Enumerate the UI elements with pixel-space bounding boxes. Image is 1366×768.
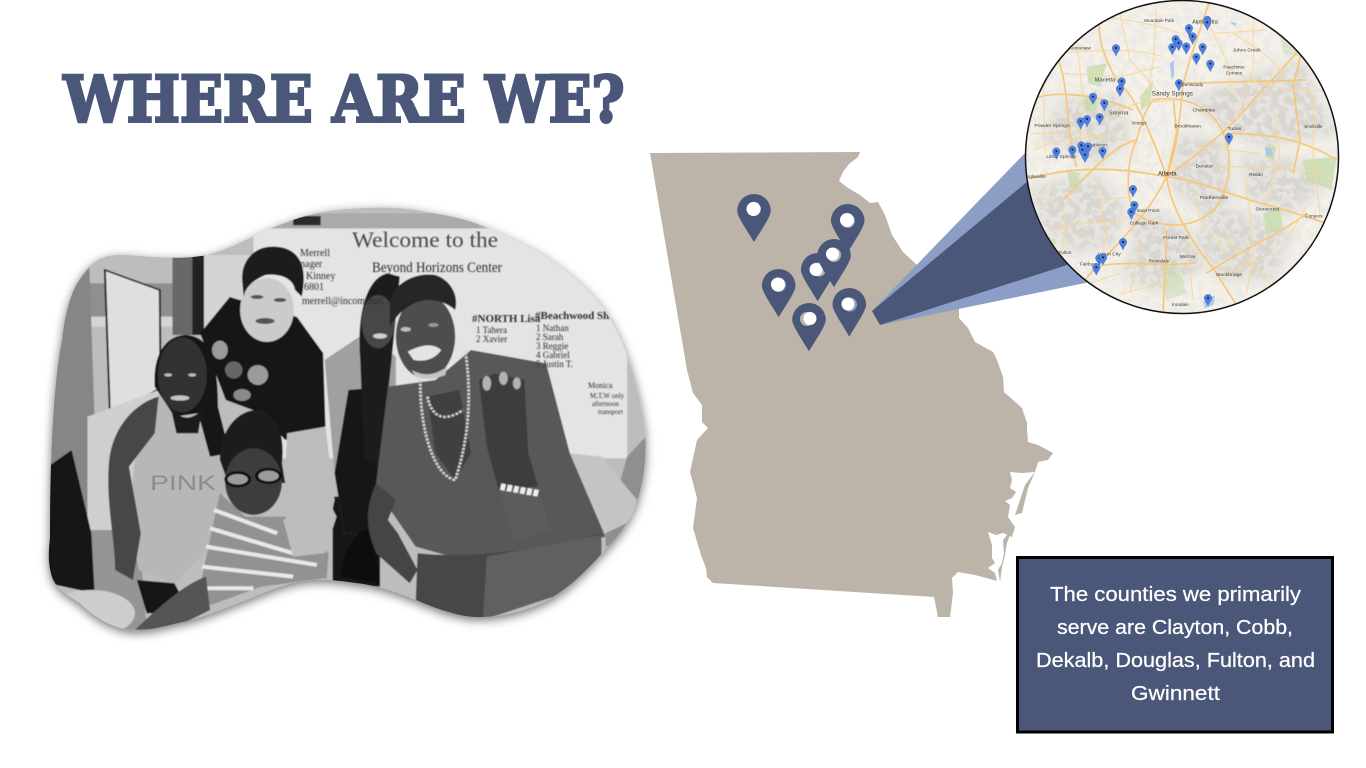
whiteboard handwriting: 1 Nathan [536, 323, 569, 333]
place labels: Morrow [1180, 254, 1196, 259]
whiteboard handwriting: 4 Gabriel [536, 350, 570, 360]
whiteboard handwriting: 2 Xavier [476, 334, 507, 344]
place labels: College Park [1130, 221, 1159, 227]
place labels: Alpharetta [1192, 19, 1219, 25]
map pin: west [762, 269, 796, 317]
callout cone: dark [872, 181, 1120, 325]
photo: group portrait in blob frame [42, 203, 653, 640]
whiteboard handwriting: M,T,W only [590, 392, 625, 400]
place labels: Dunwoody [1181, 82, 1204, 87]
place labels: Marietta [1095, 78, 1116, 84]
place labels: Panthersville [1200, 195, 1228, 201]
water [1170, 22, 1273, 308]
map pin: south [792, 303, 826, 351]
place labels: Decatur [1196, 164, 1213, 170]
map: Georgia state silhouette [650, 152, 1053, 617]
place labels: Lithia Springs [1046, 154, 1077, 160]
place labels: Kennesaw [1069, 45, 1092, 50]
callout: counties served: Dekalb, Douglas, Fulton, and [1036, 650, 1315, 672]
whiteboard handwriting: afternoon [592, 400, 619, 408]
place labels: Fairburn [1080, 261, 1098, 266]
urban texture grain [1020, 0, 1347, 317]
place labels: Stockbridge [1216, 272, 1242, 278]
place labels: Stonecrest [1255, 207, 1280, 213]
callout cone: light [872, 153, 1100, 325]
back woman [325, 333, 396, 537]
place labels: Peachtree [1223, 65, 1245, 70]
place labels: Redan [1249, 172, 1263, 177]
callout: counties served: serve are Clayton, Cobb, [1057, 617, 1293, 639]
whiteboard handwriting: 3 Reggie [536, 341, 568, 351]
place labels: Brookhaven [1174, 123, 1201, 129]
place labels [1021, 18, 1323, 307]
whiteboard handwriting: Beyond Horizons Center [372, 260, 502, 276]
place labels: Johns Creek [1233, 48, 1261, 54]
whiteboard handwriting: merrell@incommun [302, 296, 383, 307]
map: barrier islands [998, 472, 1035, 582]
whiteboard handwriting: 1 Tahera [476, 325, 507, 335]
left woman [132, 400, 160, 571]
whiteboard handwriting: transport [598, 408, 623, 416]
wheelchair [341, 528, 380, 583]
whiteboard handwriting: #NORTH Lisa [472, 313, 541, 325]
seated woman with glasses [202, 494, 329, 606]
map pin: centre-high [817, 239, 851, 287]
place labels: Vinings [1131, 121, 1147, 126]
place labels: Riverdale [1148, 259, 1170, 265]
place labels: Mountain Park [1144, 18, 1175, 23]
map pin: centre-low [801, 253, 834, 301]
inset map: metro Atlanta [1020, 0, 1347, 317]
whiteboard handwriting: Merrell [300, 248, 330, 259]
urban texture patches [1030, 60, 1340, 293]
man with hat [376, 350, 605, 557]
place labels: Sandy Springs [1152, 91, 1193, 98]
whiteboard handwriting: Monica [588, 381, 613, 390]
whiteboard handwriting: 6801 [304, 282, 324, 293]
whiteboard handwriting [300, 227, 625, 416]
map pin: east [832, 288, 866, 337]
green patches [1033, 30, 1337, 300]
place labels: Union City [1098, 252, 1121, 258]
place labels: Snellville [1304, 124, 1323, 129]
place labels: Mableton [1088, 143, 1107, 148]
location markers [1052, 16, 1233, 306]
place labels: Powder Springs [1034, 123, 1070, 129]
place labels: Fulton [1059, 250, 1072, 255]
map pin: north-west [737, 194, 771, 242]
shirt lettering: PINK [150, 472, 216, 495]
place labels: Irondale [1172, 302, 1189, 307]
whiteboard handwriting: Welcome to the [352, 227, 498, 252]
place labels: Conyers [1305, 214, 1323, 219]
callout: counties served [1018, 558, 1332, 732]
whiteboard handwriting: 2 Sarah [536, 332, 564, 342]
callout: counties served: The counties we primarily [1050, 584, 1301, 606]
tall young man [200, 297, 325, 440]
title: WHERE ARE WE? [63, 62, 624, 138]
highways [1030, 0, 1337, 313]
place labels: Atlanta [1158, 172, 1177, 178]
whiteboard handwriting: 5 Justin T. [536, 359, 573, 369]
callout: counties served: Gwinnett [1131, 683, 1220, 705]
place labels: Douglasville [1021, 174, 1046, 179]
place labels: Tucker [1228, 126, 1242, 131]
whiteboard handwriting: nager [300, 259, 323, 270]
place labels: Smyrna [1109, 111, 1129, 117]
whiteboard handwriting: #Beachwood Sha [535, 310, 615, 322]
map pin: north-east [831, 204, 864, 253]
place labels: Forest Park [1163, 235, 1189, 241]
place labels: Chamblee [1193, 108, 1216, 114]
place labels: East Point [1137, 208, 1160, 214]
whiteboard handwriting: Kinney [306, 271, 335, 282]
place labels: Corners [1226, 71, 1243, 76]
